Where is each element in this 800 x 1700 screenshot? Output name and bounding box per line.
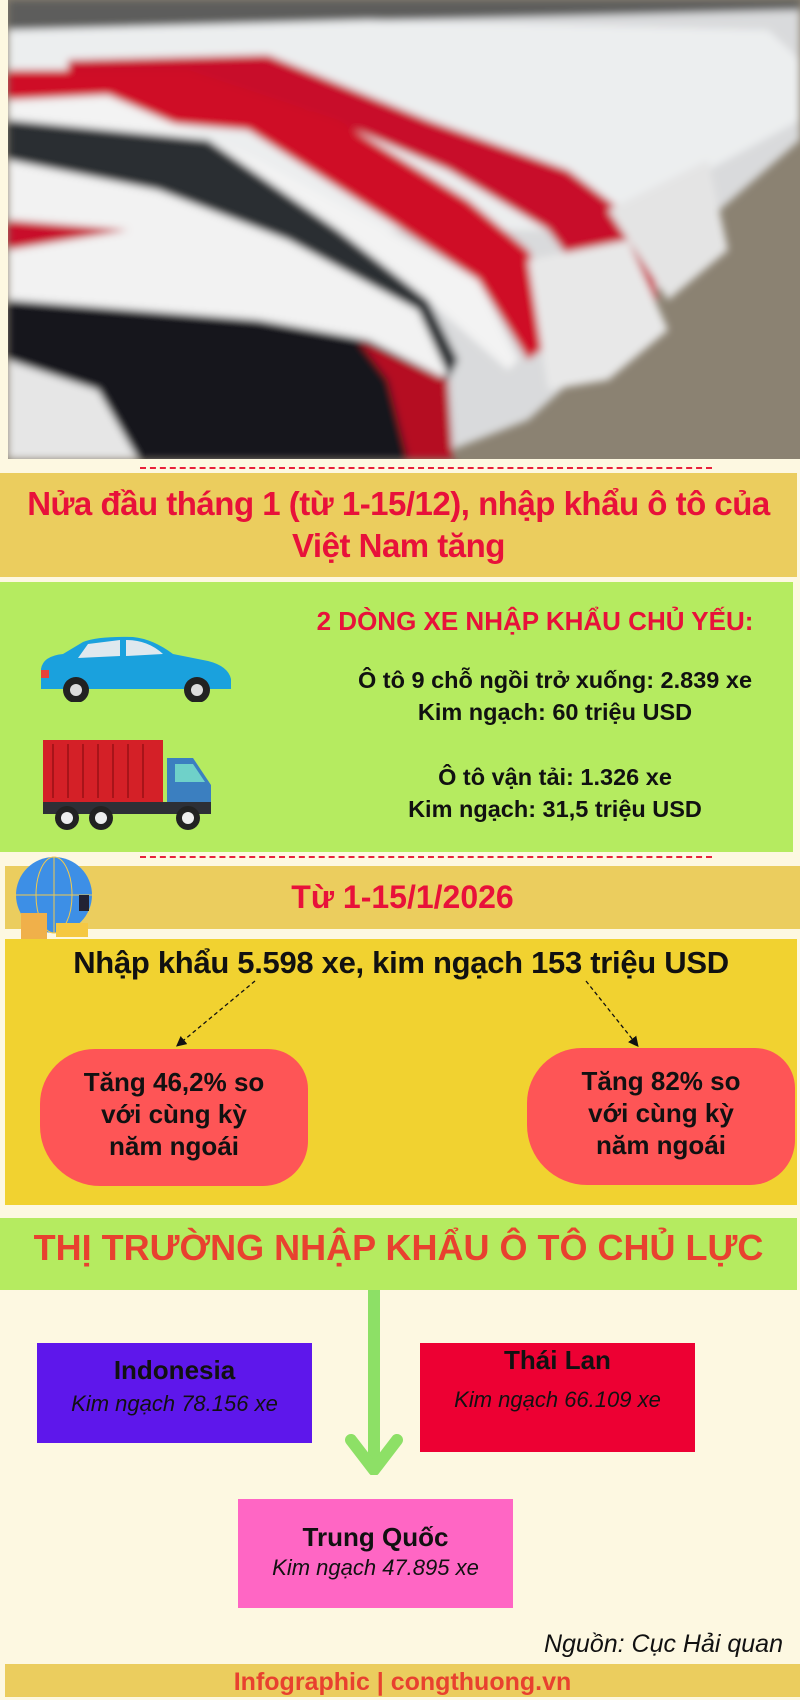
box: Thailand: Kim ngạch 66.109 xe bbox=[454, 1387, 661, 1412]
title banner: Nửa đầu tháng 1 (từ 1-15/12), nhập khẩu ô tô của bbox=[27, 485, 770, 522]
callout: +46.2% bbox=[40, 1049, 308, 1186]
callout: +46.2%: năm ngoái bbox=[109, 1131, 239, 1161]
box: China: Trung Quốc bbox=[303, 1522, 448, 1552]
text: passenger cars: Kim ngạch: 60 triệu USD bbox=[418, 699, 692, 725]
text: passenger cars: Ô tô 9 chỗ ngồi trở xuống: 2.839 xe bbox=[358, 667, 752, 693]
text: trucks bbox=[408, 764, 702, 822]
callout: +82% bbox=[527, 1048, 795, 1185]
arrows: dashed bbox=[176, 980, 639, 1047]
text: passenger cars bbox=[358, 667, 752, 725]
heading: 2 main types: 2 DÒNG XE NHẬP KHẨU CHỦ YẾU: bbox=[317, 606, 753, 636]
heading: main markets bbox=[0, 1218, 797, 1290]
callout: +46.2%: với cùng kỳ bbox=[101, 1099, 247, 1129]
text: trucks: Ô tô vận tải: 1.326 xe bbox=[438, 764, 672, 790]
text: total imports: Nhập khẩu 5.598 xe, kim ngạch 153 triệu USD bbox=[73, 945, 729, 980]
box: China bbox=[238, 1499, 513, 1608]
panel: two main vehicle types bbox=[0, 582, 793, 852]
photo: cars in parking lot bbox=[8, 0, 800, 459]
box: Indonesia: Indonesia bbox=[114, 1355, 235, 1385]
box: Thailand bbox=[420, 1343, 695, 1452]
date banner bbox=[5, 866, 800, 929]
callout: +82%: Tăng 82% so bbox=[582, 1066, 740, 1096]
panel: totals bbox=[5, 939, 797, 1205]
date banner: Từ 1-15/1/2026 bbox=[291, 879, 514, 915]
title banner bbox=[0, 473, 797, 577]
box: Indonesia bbox=[37, 1343, 312, 1443]
footer: Infographic | congthuong.vn bbox=[234, 1668, 571, 1696]
icon: blue car bbox=[41, 636, 231, 702]
box: Indonesia: Kim ngạch 78.156 xe bbox=[71, 1391, 278, 1416]
heading: main markets: THỊ TRƯỜNG NHẬP KHẨU Ô TÔ CHỦ LỰC bbox=[34, 1227, 763, 1268]
callout: +82%: năm ngoái bbox=[596, 1130, 726, 1160]
icon: container truck bbox=[43, 740, 211, 830]
box: China: Kim ngạch 47.895 xe bbox=[272, 1555, 479, 1580]
source: Nguồn: Cục Hải quan bbox=[544, 1630, 783, 1658]
text: trucks: Kim ngạch: 31,5 triệu USD bbox=[408, 796, 702, 822]
arrow: green down bbox=[345, 1290, 403, 1475]
footer bbox=[5, 1664, 800, 1697]
callout: +46.2%: Tăng 46,2% so bbox=[84, 1067, 264, 1097]
box: Thailand: Thái Lan bbox=[504, 1345, 611, 1375]
callout: +82%: với cùng kỳ bbox=[588, 1098, 734, 1128]
icon: globe import bbox=[16, 856, 92, 939]
title banner: Việt Nam tăng bbox=[292, 527, 505, 564]
